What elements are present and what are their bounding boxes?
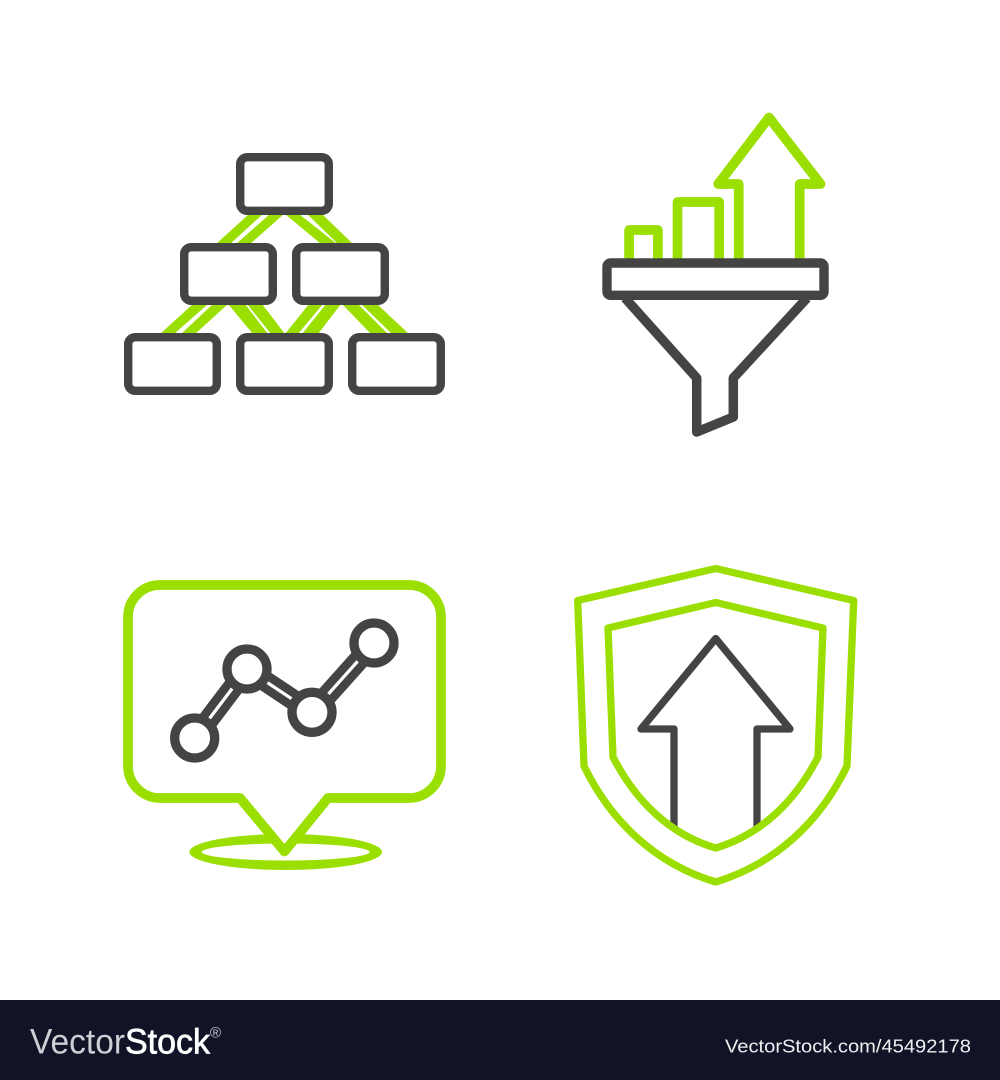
up arrow bbox=[641, 638, 790, 830]
growth bars and arrow bbox=[629, 118, 820, 260]
speech bubble pin bbox=[128, 585, 441, 852]
funnel body bbox=[625, 298, 807, 432]
image id: VectorStock.com/45492178 bbox=[725, 1036, 971, 1057]
inner shield bbox=[608, 602, 823, 848]
hierarchy boxes bbox=[128, 157, 441, 391]
funnel rim bbox=[607, 263, 824, 295]
icon: shield with up arrow bbox=[578, 568, 854, 882]
brand logo: Stock bbox=[125, 1022, 210, 1062]
location ring bbox=[189, 834, 382, 870]
brand logo bbox=[30, 1022, 221, 1062]
chart points bbox=[175, 623, 394, 758]
footer bar bbox=[0, 1000, 1000, 1080]
icon: funnel with growth arrow bbox=[607, 118, 824, 432]
outer shield bbox=[578, 568, 854, 882]
brand logo: ® bbox=[210, 1024, 221, 1042]
hierarchy connectors bbox=[160, 214, 409, 334]
chart connectors bbox=[195, 643, 374, 738]
brand logo: Vector bbox=[30, 1022, 125, 1062]
icon: hierarchy pyramid bbox=[128, 157, 441, 391]
icon: map pin line chart bbox=[128, 585, 441, 870]
